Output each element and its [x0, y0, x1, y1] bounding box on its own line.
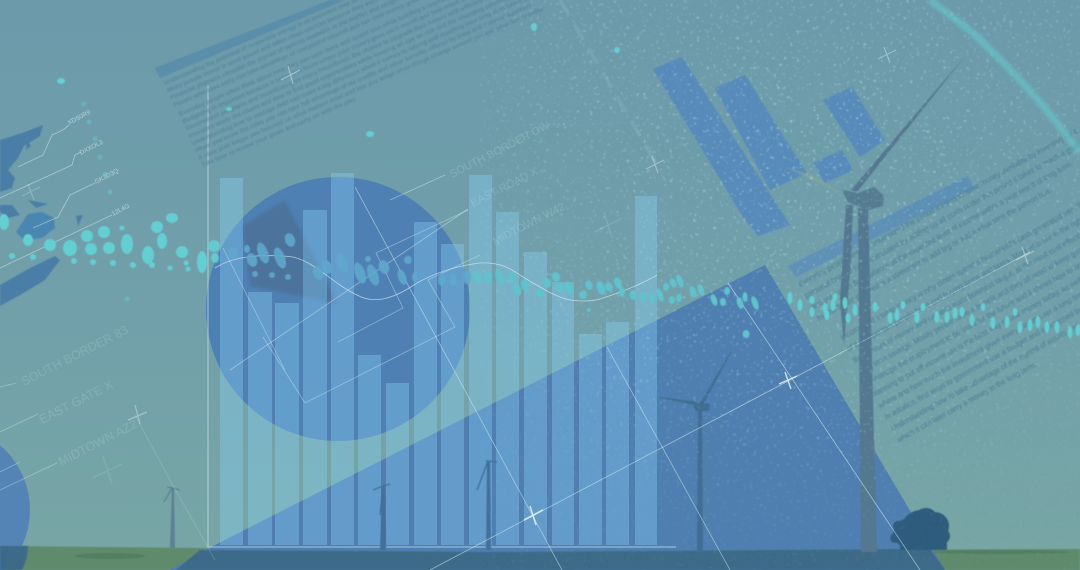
teal dot wave left [0, 23, 620, 273]
label: 12L4G [111, 203, 131, 218]
landmass: antarctica [0, 256, 60, 306]
teal dot wave through circle [208, 232, 471, 287]
blade up right [851, 55, 966, 192]
paragraph one: personal finance habit calculated by adding up all costs under this period it takes to reach a goal [803, 140, 1080, 300]
ground under blue panel [0, 546, 945, 570]
location labels centre [448, 119, 567, 248]
ground strip [0, 546, 1080, 570]
turbine: far left [164, 487, 180, 548]
location labels left [19, 323, 140, 469]
landmass: asia [0, 125, 43, 192]
text block right [796, 126, 1080, 445]
cross [92, 456, 122, 484]
midtown: MIDTOWN W42 [491, 201, 567, 248]
tower [858, 208, 877, 552]
bar chart [208, 86, 676, 547]
tree [890, 508, 950, 550]
paragraph two: Take time to review your goals and carry on with the plan [200, 96, 357, 169]
slanted bar 3 [823, 87, 885, 157]
small blue circle bottom left [0, 425, 30, 570]
turbine: mid right [657, 352, 731, 552]
blue slanted bars top right [653, 57, 975, 277]
blade down [840, 205, 853, 345]
cross [524, 506, 543, 525]
distant wind turbines [164, 352, 731, 552]
blade left [785, 167, 842, 194]
east gate: EAST GATE X [37, 377, 116, 427]
label: DXXOL3 [79, 139, 105, 157]
landmass: islands [0, 200, 48, 218]
cross [1016, 247, 1034, 264]
blue angled panel [170, 265, 945, 570]
paragraph two: When you know the rules you can take full advantage of tax credits and other benefits offered by local and national agencies [194, 2, 533, 155]
midtown: MIDTOWN AZ2 [56, 417, 140, 469]
axis [208, 86, 676, 547]
cross [22, 184, 40, 200]
cross [281, 66, 300, 84]
slanted bar 1 [653, 57, 790, 236]
south border: SOUTH BORDER 83 [19, 323, 131, 389]
paragraph one: for the future planned is a statement to add big or add a what time the person has. [815, 185, 1054, 323]
world map fragment [0, 125, 83, 306]
large wind turbine [785, 55, 966, 552]
label: XDS0R9 [67, 109, 92, 127]
cross [595, 212, 622, 238]
cross [128, 405, 147, 424]
label: GK3D3Q [94, 167, 120, 186]
turbine: centre [477, 461, 497, 550]
landmass: new zealand [76, 215, 83, 226]
map callout labels [67, 109, 131, 218]
paragraph two: A clear plan keeps you focused on what matters most and lets you adapt when things change around you and your family today [197, 5, 545, 162]
paragraph two: which it can later carry a money in the long term. [894, 360, 1038, 445]
slanted bar 4 [813, 150, 853, 183]
paragraph one: and your cash flow balance at the expected level of income within a year result of long term [809, 160, 1073, 312]
teal arc top right [930, 0, 1080, 152]
south border: SOUTH BORDER OW [448, 119, 552, 181]
faint dot chain [82, 102, 130, 302]
speckled particle field [480, 0, 1080, 570]
paragraph one: Everyday people need to understand the period it takes to save money available by investing for it [796, 126, 1080, 289]
landmass: australia [16, 212, 55, 240]
slanted bar 2 [715, 75, 807, 190]
text block top [155, 0, 575, 169]
blue circle [206, 177, 470, 441]
cross [646, 156, 664, 173]
turbine: centre left [373, 484, 390, 550]
cross [779, 372, 797, 389]
circle darker shading [242, 200, 338, 304]
landmass: japan [26, 140, 31, 150]
cross markers [22, 47, 1034, 525]
east road: EAST ROAD X [469, 165, 541, 210]
teal dot wave right [788, 292, 1080, 338]
map callout lines [0, 125, 112, 268]
cross [878, 47, 896, 63]
header bar [155, 0, 345, 78]
nacelle [842, 187, 884, 210]
slanted header bar [788, 176, 975, 277]
bars [220, 173, 657, 545]
teal dot wave centre [471, 268, 760, 338]
paragraph two [838, 189, 1080, 445]
